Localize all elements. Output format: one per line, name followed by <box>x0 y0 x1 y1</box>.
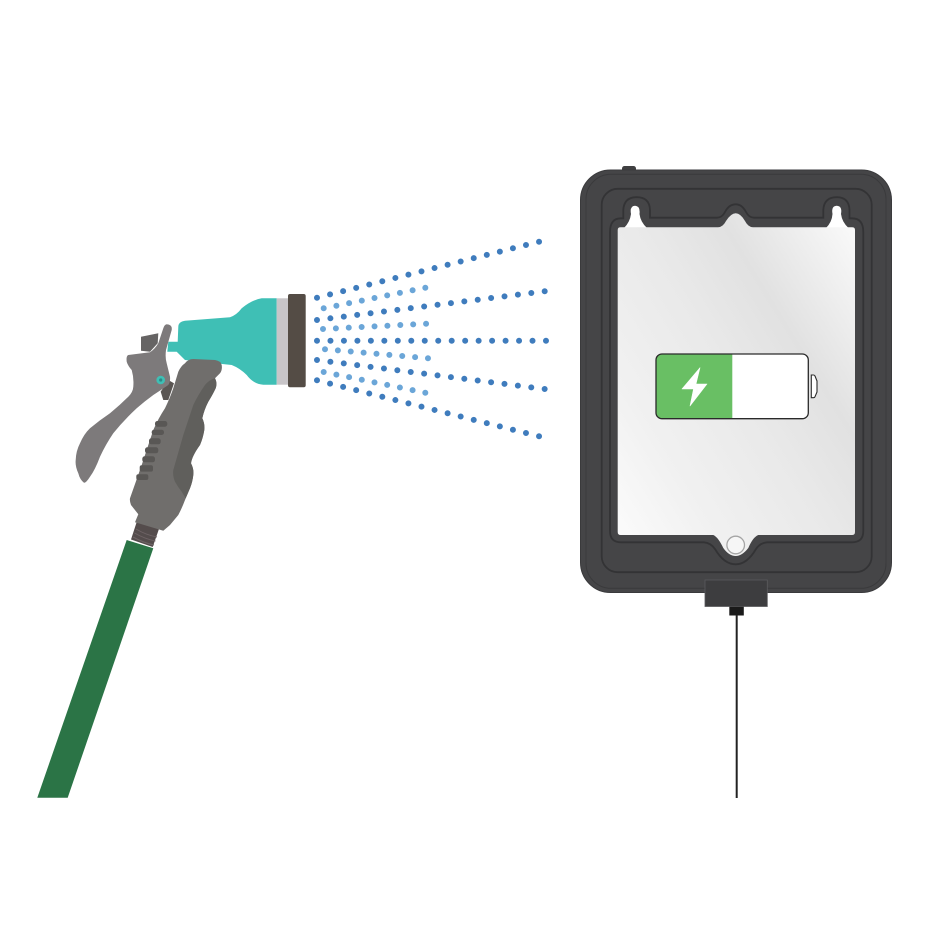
screen <box>618 213 855 556</box>
icon: lightning bolt <box>682 368 707 406</box>
battery outline <box>656 354 808 419</box>
nozzle body <box>167 298 277 385</box>
trigger pivot <box>156 376 165 384</box>
right mounting slot <box>826 206 848 228</box>
case outer groove <box>586 174 886 588</box>
home button <box>727 536 744 554</box>
nozzle ring <box>277 298 288 385</box>
nozzle head <box>288 294 306 387</box>
grip <box>130 359 222 531</box>
grip slots <box>136 421 167 480</box>
garden hose <box>37 540 153 798</box>
charging cable <box>736 615 738 798</box>
water spray: inner light streams <box>323 288 428 393</box>
battery terminal <box>811 375 817 398</box>
screen bezel groove <box>610 197 863 564</box>
grip side panel <box>173 378 216 498</box>
case body <box>580 170 892 592</box>
charging dock connector <box>705 580 767 606</box>
trigger lever <box>76 324 172 483</box>
case inner groove <box>602 189 872 572</box>
battery charge level <box>656 354 732 419</box>
battery indicator <box>656 354 817 419</box>
tablet case <box>580 166 892 592</box>
left mounting slot <box>624 206 647 228</box>
pivot shadow <box>161 380 174 400</box>
charging plug <box>729 607 744 616</box>
trigger stop <box>141 333 158 352</box>
battery body <box>656 354 808 419</box>
power button <box>622 166 636 174</box>
water spray: outer dark streams <box>317 242 546 436</box>
spray nozzle gun <box>76 294 306 531</box>
hose connector <box>131 518 160 547</box>
